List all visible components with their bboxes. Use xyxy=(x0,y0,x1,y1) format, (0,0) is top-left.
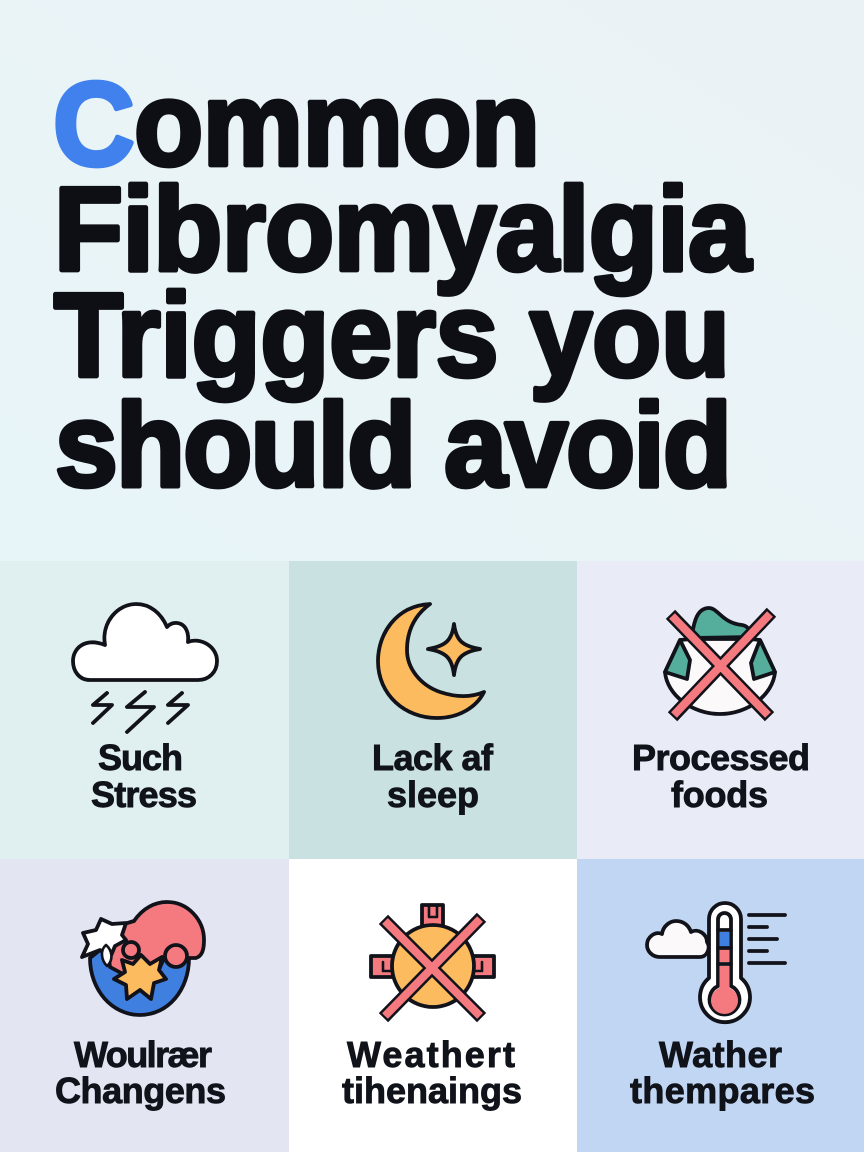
label: foods xyxy=(671,774,768,815)
label xyxy=(372,737,494,815)
icon: thermometer with cloud xyxy=(647,903,785,1022)
title: Common xyxy=(53,57,540,191)
label: Woulrær xyxy=(74,1034,212,1075)
label xyxy=(91,737,197,815)
label xyxy=(630,1034,815,1111)
title panel xyxy=(0,0,864,561)
title: Fibromyalgia xyxy=(54,162,753,296)
panel: wouler changens xyxy=(0,859,289,1152)
label xyxy=(342,1034,522,1111)
label: tihenaings xyxy=(342,1070,522,1111)
label: Stress xyxy=(91,774,197,815)
panel: weather temperatures xyxy=(577,859,864,1152)
icon: storm cloud xyxy=(73,604,217,732)
icon: mixed shapes badge xyxy=(82,902,204,1015)
label xyxy=(55,1034,226,1111)
label: Weathert xyxy=(347,1034,515,1075)
title: Triggers you xyxy=(54,268,730,402)
icon: crossed-out sun xyxy=(371,905,494,1016)
label xyxy=(632,737,810,815)
panel: lack of sleep xyxy=(289,561,577,859)
label: Lack af xyxy=(372,737,494,778)
label: sleep xyxy=(387,774,479,815)
panel: processed foods xyxy=(577,561,864,859)
label: Such xyxy=(98,737,183,778)
title xyxy=(53,57,753,512)
panel: weather changes xyxy=(289,859,577,1152)
title: should avoid xyxy=(55,378,732,512)
label: Wather xyxy=(659,1034,782,1075)
icon: crossed-out food xyxy=(665,608,775,715)
label: thempares xyxy=(630,1070,815,1111)
label: Changens xyxy=(55,1070,226,1111)
panel: such stress xyxy=(0,561,289,859)
icon: moon and star xyxy=(378,604,484,718)
label: Processed xyxy=(632,737,810,778)
